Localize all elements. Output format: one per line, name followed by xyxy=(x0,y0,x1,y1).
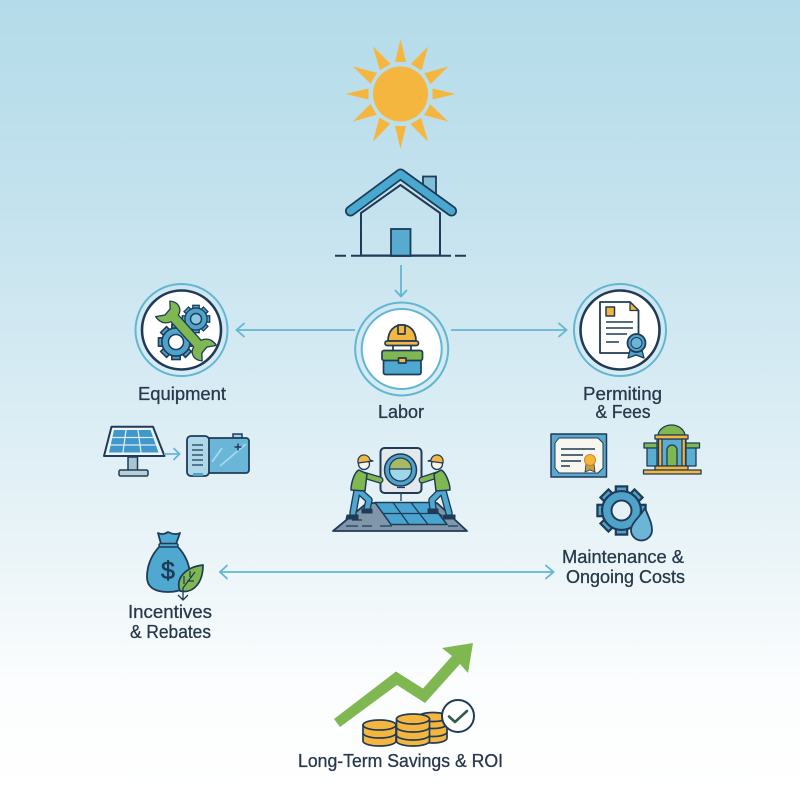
solar panel on ground xyxy=(375,502,447,524)
panel: permitting xyxy=(574,284,666,376)
label: labor: Labor xyxy=(378,402,424,422)
arrow: house to labor xyxy=(396,265,406,296)
icon: government building xyxy=(644,425,701,474)
icon: coin stacks xyxy=(363,712,448,746)
panel: equipment xyxy=(136,284,228,376)
icon: hard hat xyxy=(385,325,418,351)
illustration: workers installing meter and panel xyxy=(333,448,467,531)
label: incentives and rebates xyxy=(128,602,212,642)
label: maintenance and ongoing costs: Ongoing Costs xyxy=(566,567,685,587)
arrow: labor to equipment xyxy=(236,324,355,336)
icon: wrench xyxy=(154,298,218,364)
icon: money bag with leaf: $ xyxy=(161,557,175,585)
icon: check badge xyxy=(442,700,474,732)
icon: money bag with leaf xyxy=(147,532,203,600)
label: incentives and rebates: & Rebates xyxy=(130,622,211,642)
icon: solar panel xyxy=(104,427,164,476)
worker right xyxy=(422,455,455,519)
icon: certificate xyxy=(551,434,606,477)
label: maintenance and ongoing costs xyxy=(562,547,685,587)
icon: sun xyxy=(346,39,456,149)
icon: battery xyxy=(187,434,249,476)
meter xyxy=(380,448,422,501)
label: equipment: Equipment xyxy=(138,384,226,404)
label: permitting and fees: Permiting xyxy=(583,384,662,404)
worker left xyxy=(346,455,380,519)
icon: gears xyxy=(158,305,210,360)
label: long-term savings and roi: Long-Term Savings & ROI xyxy=(298,751,503,771)
arrow: panel to battery xyxy=(164,448,180,460)
icon: toolbox xyxy=(382,350,422,374)
icon: house xyxy=(335,174,466,256)
label: maintenance and ongoing costs: Maintenance & xyxy=(562,547,684,567)
panel: labor xyxy=(355,302,448,396)
label: permitting and fees: & Fees xyxy=(596,402,650,422)
ground xyxy=(333,503,467,531)
label: permitting and fees xyxy=(583,384,662,422)
icon: gear with water drop xyxy=(597,486,652,540)
label: incentives and rebates: Incentives xyxy=(128,602,212,622)
icon: green growth arrow xyxy=(334,643,473,727)
arrow: labor to permitting xyxy=(451,324,566,336)
arrow: incentives to maintenance xyxy=(220,566,554,578)
icon: document with seal xyxy=(600,302,646,358)
